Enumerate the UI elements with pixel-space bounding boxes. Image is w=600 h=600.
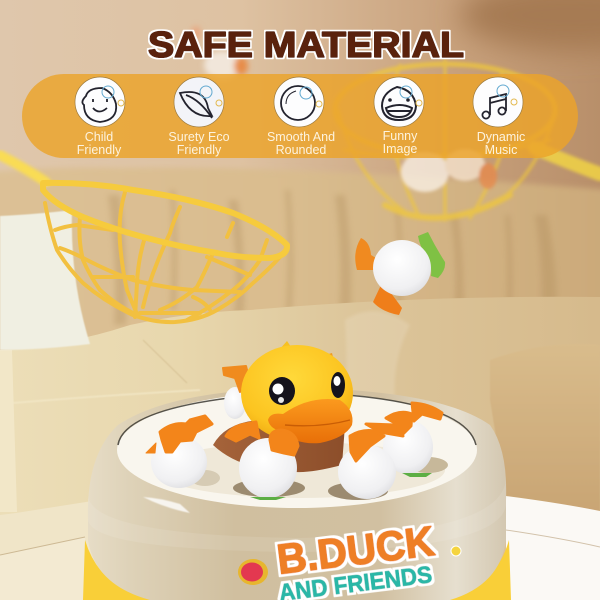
feature: funny image	[374, 77, 424, 156]
motion trail	[345, 311, 410, 400]
sticker	[238, 559, 268, 585]
panel: features band	[22, 74, 578, 158]
logo: B.DUCK	[274, 517, 437, 583]
feature: dynamic music: Music	[485, 143, 517, 157]
feature: child friendly	[75, 77, 125, 157]
flying egg	[355, 232, 445, 315]
toy: whack-a-duck	[83, 341, 511, 600]
feature: dynamic music	[473, 77, 525, 157]
label: Child	[85, 130, 113, 144]
title: SAFE MATERIAL	[148, 24, 464, 65]
feature: child friendly: Friendly	[77, 143, 122, 157]
feature: surety eco friendly: Friendly	[177, 143, 222, 157]
eggs	[151, 436, 207, 488]
label: Funny	[383, 129, 418, 143]
blurred orange egg behind title	[191, 26, 248, 79]
feature: smooth and rounded	[267, 77, 335, 157]
feature: surety eco friendly	[168, 77, 230, 157]
holes	[233, 479, 305, 497]
duck	[241, 341, 353, 443]
net: top right, blurred	[335, 60, 600, 220]
feature: smooth and rounded: Rounded	[276, 143, 326, 157]
glass body	[88, 388, 506, 600]
label: Surety Eco	[168, 130, 230, 144]
star sticker	[451, 546, 461, 556]
claws	[146, 403, 442, 461]
label: Smooth And	[267, 130, 335, 144]
feature: funny image: Image	[383, 142, 417, 156]
label: Dynamic	[477, 130, 525, 144]
yellow base	[83, 540, 511, 600]
pillow	[0, 210, 90, 350]
back egg and claw	[223, 366, 249, 419]
net: left	[0, 155, 287, 322]
shell	[213, 420, 345, 472]
deck	[117, 392, 477, 508]
